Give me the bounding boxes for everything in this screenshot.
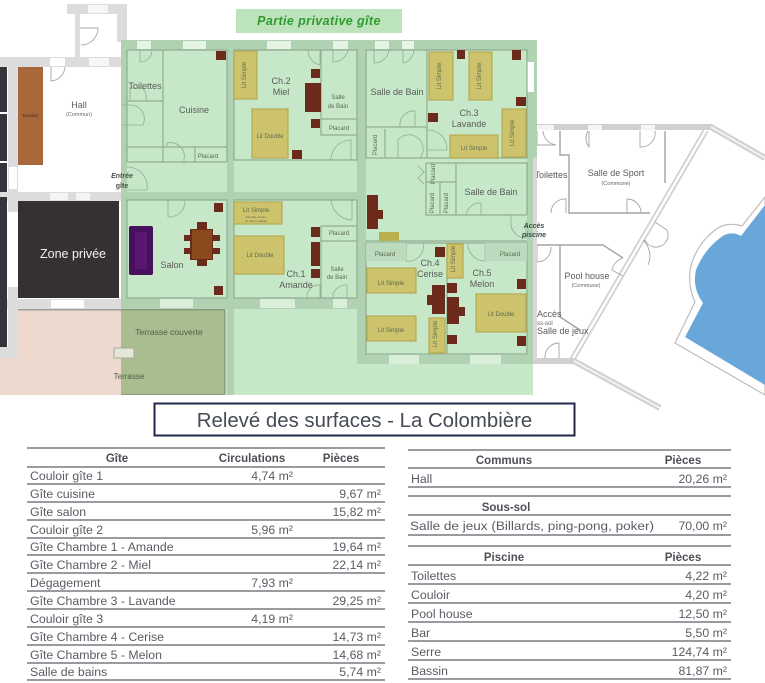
furniture: olive bench [379,232,399,241]
table: gîte: 4,19 m² [251,612,293,626]
table: gîte: Dégagement [30,576,101,590]
table: gîte: 29,25 m² [332,594,381,608]
text: room labels: Salon [160,260,184,270]
text: room labels: Terrasse [114,372,145,381]
table: gîte: Gîte Chambre 5 - Melon [30,648,162,662]
brown storage block: Escalier [22,113,39,118]
text: annex room labels [534,168,645,336]
table: gîte: 14,73 m² [332,630,381,644]
heading: partie privative gîte: Partie privative gîte [257,14,381,28]
text: bed labels: Lit Simple [378,281,405,287]
floor plan [0,4,765,408]
placards: Placard [375,252,395,258]
table: gîte: Gîte salon [30,505,86,519]
table: gîte: Gîte Chambre 3 - Lavande [30,594,176,608]
table: communs: Hall [411,472,432,486]
title: relevé des surfaces [154,404,574,436]
table: sous-sol: Sous-sol [482,502,530,514]
panel: zone privée: Zone privée [40,247,106,261]
text: room labels: Ch.1 [286,269,306,279]
table: piscine: Pièces [665,552,701,564]
text: room labels: Terrasse couverte [135,327,203,337]
table: sous-sol [408,496,731,535]
text: bed labels: Lit Double [246,253,274,259]
furniture: dark pieces [214,50,526,346]
table: piscine: Bassin [411,664,448,678]
table: piscine: 12,50 m² [678,607,727,621]
placards: Placard [430,193,436,213]
text: annex room labels: Pool house [564,271,610,281]
text: annex room labels: (Commune) [601,181,631,187]
table: gîte: 15,82 m² [332,505,381,519]
table: gîte: Gîte Chambre 4 - Cerise [30,630,164,644]
title: relevé des surfaces: Relevé des surfaces - La Colombière [197,410,532,432]
table: piscine: 4,22 m² [685,569,727,583]
table: piscine: Piscine [484,552,524,564]
text: bed labels: Lit Simple [477,62,483,89]
text: room labels: Ch.5 [472,268,492,278]
dark columns [0,67,7,347]
table: gîte: Salle de bains [30,665,107,679]
table: communs: Pièces [665,455,701,467]
text: annex room labels: Accès [537,309,562,319]
table: gîte: Couloir gîte 2 [30,523,103,537]
text: annex room labels: (Commune) [571,283,601,289]
text: bed labels: (Double, ancien [245,215,267,219]
table: gîte: 5,74 m² [339,665,381,679]
table: sous-sol: 70,00 m² [678,519,727,533]
table: gîte: Gîte Chambre 1 - Amande [30,540,174,554]
text: room labels: Miel [273,87,289,97]
table: piscine: 5,50 m² [685,626,727,640]
text: bed labels: Lit Simple [510,119,516,146]
placards: Placard [329,231,349,237]
panel: common wing on the left [0,4,127,358]
text: room labels: Salle de Bain [370,87,424,97]
text: room labels: Amande [279,280,313,290]
placards [198,126,527,261]
table: sous-sol: Salle de jeux (Billards, ping-pong, poker) [410,519,654,533]
table: gîte: Pièces [323,453,359,465]
text: room labels: de Bain [327,275,347,281]
heading: partie privative gîte [236,9,402,33]
table: gîte: 7,93 m² [251,576,293,590]
text: room labels: Salle [331,95,345,101]
table: gîte: Couloir gîte 3 [30,612,103,626]
icon: salon dining table [184,222,220,266]
text: room labels: Ch.2 [271,76,291,86]
text: room labels [111,76,546,381]
table: piscine: Bar [411,626,430,640]
text: room labels: piscine [521,232,546,239]
text: room labels: Cuisine [179,105,209,115]
table: gîte: 19,64 m² [332,540,381,554]
table: piscine: Toilettes [411,569,456,583]
text: annex room labels: Salle de Sport [588,168,645,178]
table: communs: 20,26 m² [678,472,727,486]
placards: Placard [198,154,218,160]
text: bed labels: Lit Simple [451,245,457,272]
table: gîte: Gîte cuisine [30,487,95,501]
table: piscine: 4,20 m² [685,588,727,602]
table: piscine: Couloir [411,588,450,602]
text: bed labels: Lit Simple [433,320,439,347]
text: room labels: Melon [470,279,494,289]
text: bed labels: Lit Simple [437,62,443,89]
table: piscine [408,546,731,679]
text: room labels: Ch.3 [459,108,479,118]
text: hall label: (Commun) [66,112,92,118]
text: bed labels: Lit Double [256,134,284,140]
text: annex room labels: ss-sol [537,321,553,327]
table: gîte: Gîte Chambre 2 - Miel [30,558,151,572]
text: annex room labels: Salle de jeux [537,326,589,336]
placards: Placard [500,252,520,258]
text: bed labels: Lit Simple [378,328,405,334]
table: communs [408,450,731,487]
text: room labels: Cerise [417,269,443,279]
table: communs: Communs [476,455,532,467]
placards: Placard [431,164,437,184]
placards: Placard [444,193,450,213]
table: gîte: 9,67 m² [339,487,381,501]
text: room labels: Salle [330,267,344,273]
text: hall label [66,100,92,118]
text: bed labels [242,61,516,347]
table: piscine: 124,74 m² [672,645,727,659]
table: piscine: Pool house [411,607,473,621]
text: room labels: Toilettes [128,81,162,91]
table: piscine: 81,87 m² [678,664,727,678]
brown storage block [18,67,43,165]
panel: zone privée [18,201,119,298]
icon: salon sofa [129,226,153,275]
text: room labels: Entrée [111,173,133,180]
text: annex room labels: Toilettes [534,170,568,180]
text: room labels: gîte [116,183,128,190]
table: gîte [27,448,385,680]
table: gîte: Gîte [106,453,128,465]
room partition walls [122,50,527,354]
placards: Placard [373,135,379,155]
text: room labels: Accès [523,223,544,230]
table: gîte: Couloir gîte 1 [30,469,103,483]
text: hall label: Hall [71,100,87,110]
text: room labels: de Bain [328,104,348,110]
text: bed labels: Lit Simple [242,61,248,88]
table: gîte: 14,68 m² [332,648,381,662]
text: bed labels: Lit Simple [243,208,270,214]
table: gîte: Circulations [219,453,285,465]
text: bed labels: Lit Simple [461,146,488,152]
text: room labels: Ch.4 [420,258,440,268]
table: gîte: 4,74 m² [251,469,293,483]
panel: right-hand annex and pool walls [533,125,765,408]
table: gîte: 22,14 m² [332,558,381,572]
text: room labels: Salle de Bain [464,187,518,197]
icon: swimming pool [675,197,765,395]
table: gîte: 5,96 m² [251,523,293,537]
placards: Placard [329,126,349,132]
panel: terrasse [0,309,122,395]
text: bed labels: ou hôtel modèle) [245,219,267,223]
text: room labels: Lavande [452,119,486,129]
table: piscine: Serre [411,645,441,659]
text: bed labels: Lit Double [487,312,515,318]
furniture: beds [234,51,526,353]
panel: partie privative overlay [114,40,537,395]
